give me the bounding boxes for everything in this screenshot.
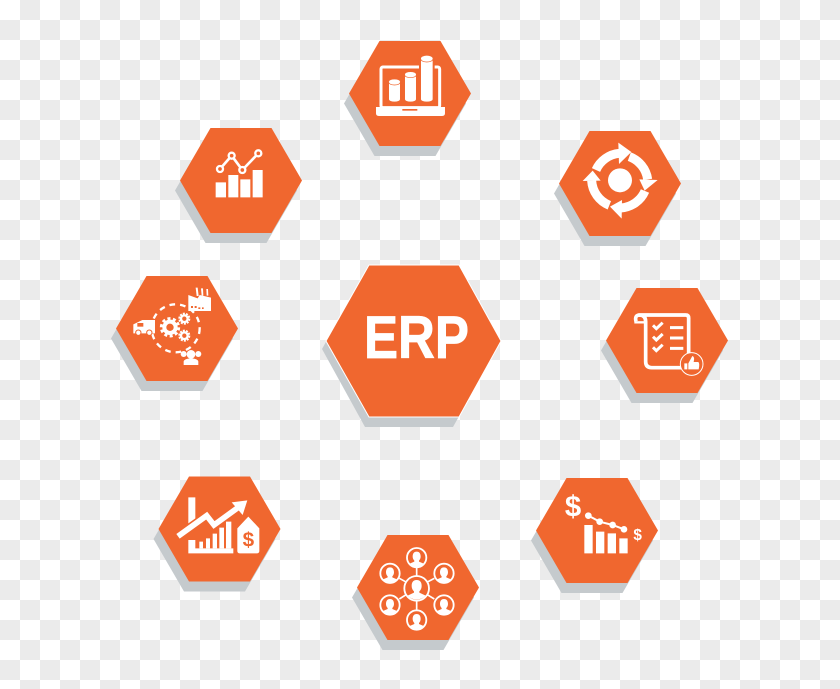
icon: laptop chart	[376, 56, 445, 116]
panel: lower left hexagon, price growth	[154, 476, 280, 592]
icon: checklist with thumbs up	[634, 315, 703, 375]
panel: upper right hexagon, circular process	[554, 131, 681, 246]
panel: right hexagon, checklist scroll	[601, 288, 728, 403]
icon: rising arrow over factory bars with price tag: $	[243, 528, 255, 551]
icon: bars with trend line	[216, 150, 263, 197]
panel: central ERP hexagon	[322, 265, 501, 427]
panel: lower right hexagon, falling costs	[531, 478, 658, 593]
heading: ERP: ERP	[364, 304, 469, 371]
panel: top hexagon, laptop with bar chart	[344, 41, 471, 156]
icon: falling cost chart with dollar signs: $	[565, 490, 581, 523]
icon: circular arrows	[583, 143, 658, 219]
panel: bottom hexagon, people network	[352, 535, 479, 650]
icon: factory, truck, gears and people	[133, 288, 211, 365]
icon: connected people network	[380, 548, 454, 630]
panel: left hexagon, supply chain	[111, 276, 238, 391]
icon: falling cost chart with dollar signs: $	[633, 527, 642, 544]
icon: falling cost chart with dollar signs	[565, 490, 642, 553]
panel: upper left hexagon, analytics chart	[175, 128, 302, 243]
